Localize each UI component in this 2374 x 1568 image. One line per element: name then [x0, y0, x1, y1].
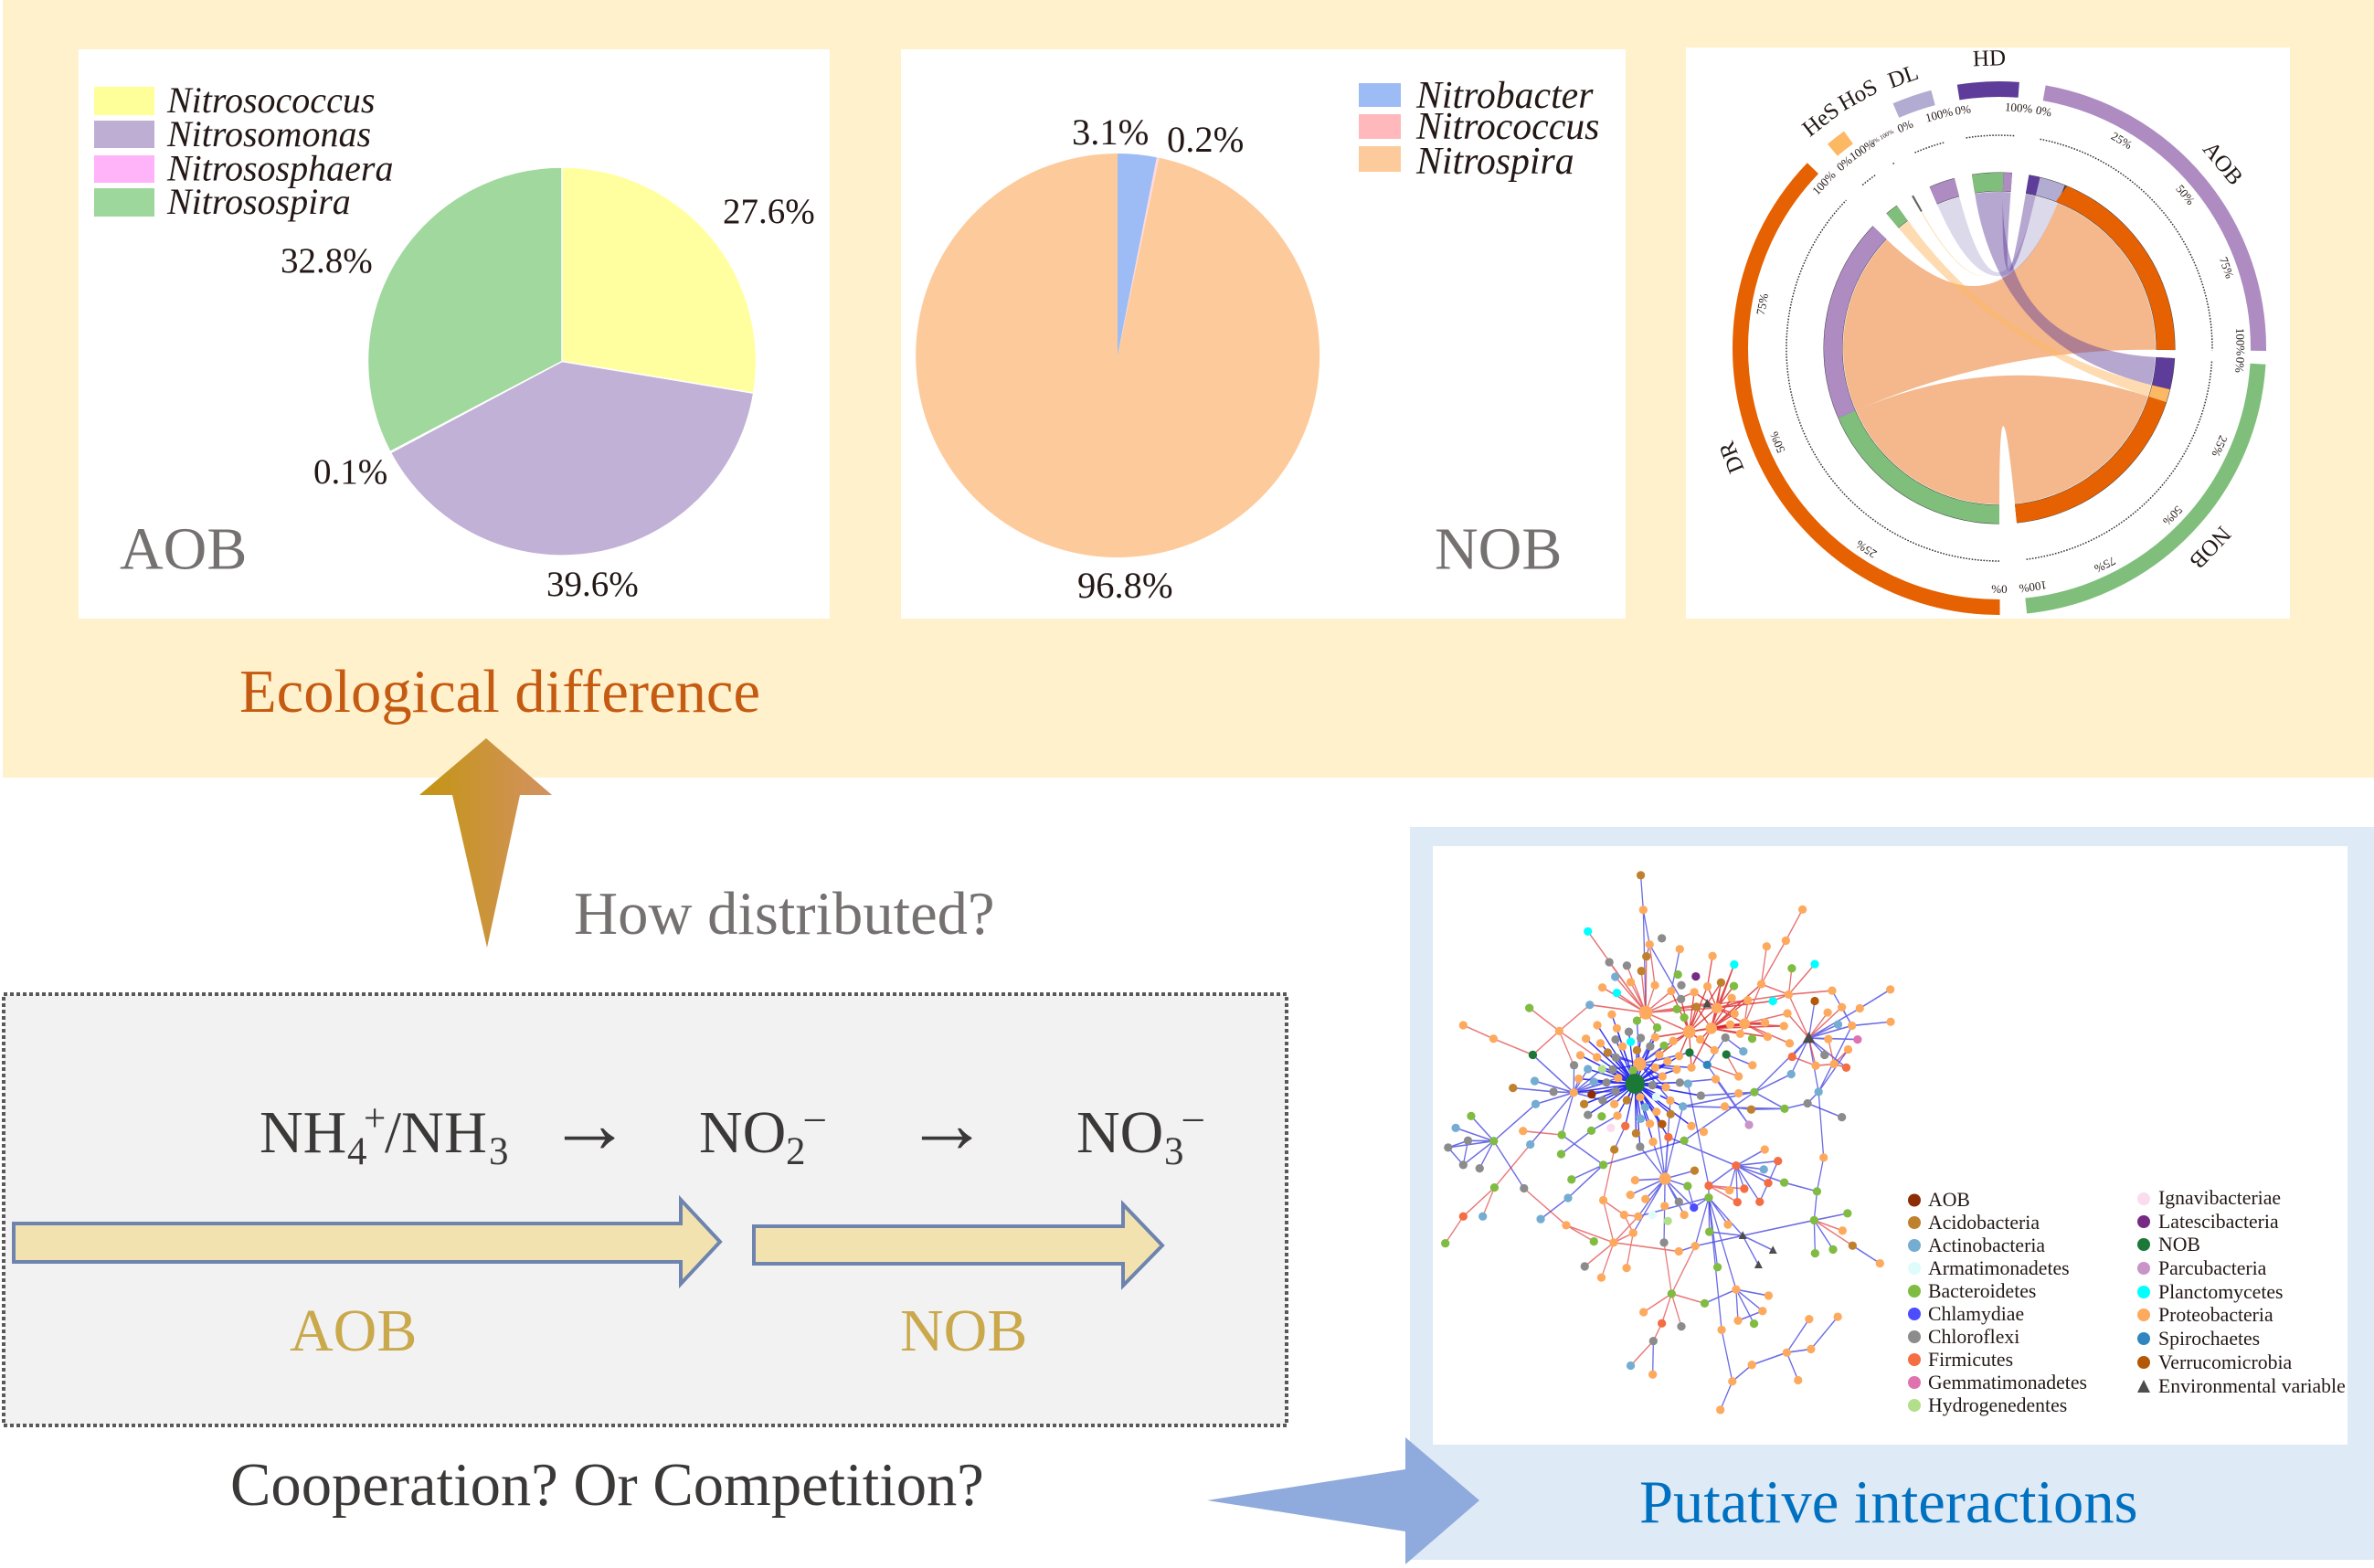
tick labels: 75%	[2093, 554, 2118, 576]
reaction equation: 3	[1164, 1130, 1184, 1173]
label: NOB: NOB	[1435, 515, 1562, 583]
reaction equation: 2	[786, 1130, 806, 1173]
legend: network phyla: Latescibacteria	[2158, 1211, 2279, 1233]
reaction equation: –	[804, 1096, 825, 1139]
network nodes: Chloroflexi	[1444, 934, 1846, 1345]
tick labels	[1754, 100, 2248, 596]
sector names: NOB	[2184, 521, 2235, 573]
NOB percentage labels	[1072, 111, 1244, 606]
label: AOB: AOB	[120, 515, 247, 583]
legend: network phyla: Verrucomicrobia	[2158, 1351, 2292, 1373]
chart: NOB pie	[916, 154, 1319, 557]
legend: network phyla: Actinobacteria	[1928, 1234, 2045, 1256]
panel: putative interactions	[1410, 827, 2374, 1560]
legend: network phyla: Chloroflexi	[1928, 1326, 2019, 1348]
NOB percentage labels: 3.1%	[1072, 111, 1149, 153]
arrow: NOB step	[754, 1204, 1162, 1286]
label: AOB: AOB	[290, 1298, 417, 1364]
panel: ecological difference	[3, 0, 2374, 778]
network edges	[1446, 875, 1891, 1410]
tick labels: 0% 100%	[1870, 128, 1895, 146]
network nodes: Bacteroidetes	[1441, 964, 1851, 1328]
heading: putative interactions: Putative interactions	[1639, 1469, 2138, 1536]
legend: AOB genera: Nitrososphaera	[166, 148, 393, 188]
arrow: AOB step	[14, 1200, 720, 1284]
legend: network phyla: Spirochaetes	[2158, 1328, 2260, 1350]
inner ring outlines	[1765, 114, 2233, 582]
panel: nitrification process	[4, 994, 1287, 1425]
legend: network phyla: Armatimonadetes	[1928, 1257, 2070, 1279]
reaction equation: /NH	[385, 1100, 487, 1166]
network nodes: other phyla	[1587, 972, 1862, 1225]
tick labels: 100%	[2233, 328, 2248, 356]
tick labels: 0%	[1991, 583, 2008, 596]
legend: network phyla: Firmicutes	[1928, 1349, 2013, 1371]
legend: network phyla: Parcubacteria	[2158, 1257, 2267, 1279]
legend: network phyla: Chlamydiae	[1928, 1303, 2024, 1325]
legend: network phyla: Acidobacteria	[1928, 1212, 2040, 1234]
sector names: HoS	[1834, 75, 1881, 116]
arrow: up to ecological difference	[419, 738, 552, 948]
panel: AOB pie card	[79, 49, 830, 619]
reaction equation: →	[905, 1077, 989, 1171]
network nodes: Acidobacteria	[1509, 871, 1857, 1250]
tick labels: 100%	[2019, 578, 2048, 596]
chart: AOB pie	[367, 167, 757, 556]
sector names: DR	[1714, 438, 1749, 477]
AOB percentage labels: 32.8%	[281, 241, 373, 281]
reaction equation	[260, 1077, 1203, 1173]
panel: chord diagram card	[1635, 0, 2364, 713]
tick labels: 100%	[1924, 104, 1955, 124]
outer sector arcs	[1635, 0, 2364, 713]
AOB percentage labels: 0.1%	[313, 452, 387, 492]
reaction equation: +	[364, 1097, 386, 1140]
chart: co-occurrence network	[1441, 871, 1895, 1414]
tick labels: 0%	[1834, 153, 1855, 174]
tick labels: 50%	[2160, 503, 2186, 528]
tick labels: 100%	[1847, 136, 1878, 164]
network nodes: NOB	[1529, 1048, 1731, 1094]
legend: network phyla: Bacteroidetes	[1928, 1280, 2036, 1302]
legend: network phyla: Ignavibacteriae	[2158, 1187, 2281, 1209]
legend: network phyla: Gemmatimonadetes	[1928, 1372, 2087, 1393]
sector names: DL	[1885, 60, 1922, 93]
sector names: AOB	[2198, 137, 2247, 190]
legend: network phyla: Proteobacteria	[2158, 1304, 2273, 1326]
tick labels: 50%	[1766, 429, 1788, 455]
tick labels: 25%	[2109, 129, 2135, 152]
legend: network phyla	[1908, 1187, 2346, 1416]
inner ring segments	[1765, 114, 2233, 582]
tick labels: 0%	[2035, 103, 2053, 120]
chords	[1843, 192, 2156, 504]
legend: NOB genera: Nitrococcus	[1415, 106, 1599, 148]
legend: NOB genera	[1359, 75, 1599, 183]
reaction equation: NH	[260, 1099, 346, 1166]
arrow: to putative interactions	[1207, 1437, 1479, 1564]
tick labels: 75%	[2217, 255, 2237, 281]
sector names	[1714, 46, 2247, 573]
heading: ecological difference: Ecological difference	[239, 659, 760, 726]
reaction equation: NO	[699, 1099, 786, 1166]
legend: network phyla: NOB	[2158, 1234, 2200, 1255]
reaction equation: 4	[347, 1130, 367, 1173]
question: how distributed: How distributed?	[574, 881, 995, 948]
tick labels: 25%	[1853, 537, 1879, 561]
legend: AOB genera: Nitrosococcus	[166, 79, 375, 121]
tick labels: 100%	[1809, 168, 1839, 197]
tick labels: 25%	[2209, 433, 2231, 459]
tick labels: 100%	[2004, 100, 2033, 116]
legend: AOB genera: Nitrosomonas	[166, 113, 371, 154]
label: NOB: NOB	[900, 1298, 1027, 1364]
chart: chord diagram	[1635, 0, 2364, 713]
AOB percentage labels: 39.6%	[546, 565, 639, 604]
tick labels: 75%	[1754, 292, 1771, 316]
AOB percentage labels: 27.6%	[723, 192, 815, 231]
network nodes: Planctomycetes	[1584, 927, 1819, 1046]
dotted tick circle	[1786, 135, 2212, 561]
sector names: HeS	[1798, 98, 1844, 142]
legend: NOB genera: Nitrospira	[1415, 141, 1574, 183]
legend: NOB genera: Nitrobacter	[1415, 75, 1594, 117]
legend: AOB genera	[94, 79, 393, 222]
network nodes: Proteobacteria	[1459, 906, 1895, 1414]
legend: network phyla: Environmental variable	[2158, 1375, 2346, 1397]
reaction equation: →	[547, 1077, 631, 1171]
sector names: HD	[1972, 46, 2006, 71]
tick labels: 0%	[1954, 101, 1972, 118]
question: cooperation or competition: Cooperation? Or Competition?	[230, 1452, 984, 1519]
network nodes: Actinobacteria	[1451, 972, 1842, 1370]
reaction equation: NO	[1076, 1099, 1163, 1166]
panel: NOB pie card	[901, 49, 1626, 619]
legend: network phyla: AOB	[1928, 1189, 1970, 1211]
tick labels: 0%	[1895, 117, 1915, 135]
tick labels: 0%	[2232, 356, 2247, 374]
legend: network phyla: Hydrogenedentes	[1928, 1394, 2067, 1416]
NOB percentage labels: 0.2%	[1167, 119, 1244, 160]
reaction equation: –	[1182, 1096, 1203, 1139]
network nodes: environmental variables	[1702, 999, 1815, 1268]
NOB percentage labels: 96.8%	[1077, 565, 1173, 606]
network nodes: Firmicutes	[1459, 1053, 1850, 1328]
tick labels: 50%	[2173, 182, 2198, 207]
legend: network phyla: Planctomycetes	[2158, 1281, 2284, 1303]
legend: AOB genera: Nitrosospira	[166, 181, 351, 222]
AOB percentage labels	[281, 192, 815, 604]
reaction equation: 3	[489, 1130, 508, 1173]
